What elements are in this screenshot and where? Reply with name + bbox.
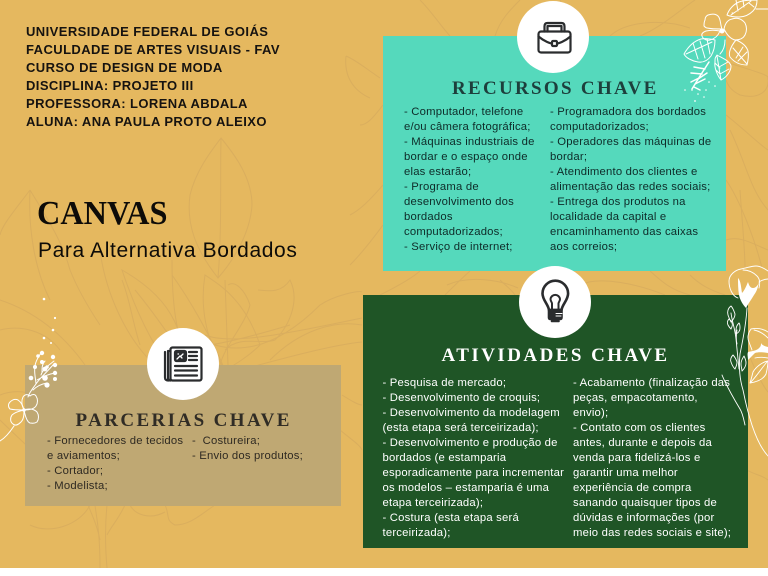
text: recursos column 2: - Entrega dos produtos na xyxy=(550,196,686,208)
text: atividades column 1: os modelos – estamparia é uma xyxy=(382,482,549,494)
header: institution block: UNIVERSIDADE FEDERAL DE GOIÁS xyxy=(26,24,268,39)
text: atividades column 2 xyxy=(573,377,731,539)
decoration: white flowers and stem right edge xyxy=(722,266,768,456)
text: recursos column 2: localidade da capital e xyxy=(550,211,666,223)
text: recursos column 1 xyxy=(404,106,535,253)
text: atividades column 1: - Costura (esta etapa será xyxy=(382,512,519,524)
text: atividades column 1: bordados (e estamparia xyxy=(382,452,506,464)
text: parcerias column 1 xyxy=(47,434,183,492)
text: parcerias column 2: - Envio dos produtos; xyxy=(192,450,303,462)
text: recursos column 1: e/ou câmera fotográfica; xyxy=(404,121,531,133)
text: recursos column 2: computadorizados; xyxy=(550,121,649,133)
text: atividades column 1: (esta etapa será terceirizada); xyxy=(382,422,539,434)
text: recursos column 2: aos correios; xyxy=(550,241,617,253)
subtitle: Para Alternativa Bordados xyxy=(38,239,297,262)
text: recursos column 2 xyxy=(550,106,711,253)
text: recursos column 2: - Operadores das máquinas de xyxy=(550,136,711,148)
icon: light bulb in white circle xyxy=(519,266,591,338)
text: atividades column 1 xyxy=(382,377,564,539)
text: recursos column 1: bordados xyxy=(404,211,453,223)
icon: newspaper in white circle xyxy=(147,328,219,400)
text: parcerias column 1: e aviamentos; xyxy=(47,450,120,462)
text: recursos column 1: - Serviço de internet; xyxy=(404,241,513,253)
text: parcerias column 2 xyxy=(192,434,303,462)
text: recursos column 2: bordar; xyxy=(550,151,587,163)
header: institution block: DISCIPLINA: PROJETO III xyxy=(26,78,194,93)
header: institution block: CURSO DE DESIGN DE MODA xyxy=(26,60,223,75)
text: recursos column 2: alimentação das redes sociais; xyxy=(550,181,710,193)
text: atividades column 2: sanando quaisquer tipos de xyxy=(573,497,717,509)
heading: parcerias chave: PARCERIAS CHAVE xyxy=(76,410,292,430)
text: atividades column 2: dúvidas e informações (por xyxy=(573,512,714,524)
text: recursos column 1: - Programa de xyxy=(404,181,479,193)
text: recursos column 2: encaminhamento das caixas xyxy=(550,226,698,238)
text: atividades column 2: meio das redes sociais e site); xyxy=(573,527,731,539)
text: atividades column 1: - Pesquisa de mercado; xyxy=(382,377,506,389)
header: institution block: FACULDADE DE ARTES VISUAIS - FAV xyxy=(26,42,280,57)
text: parcerias column 1: - Modelista; xyxy=(47,480,108,492)
decoration: white flower and sprig left xyxy=(0,298,58,442)
text: atividades column 1: esporadicamente para incrementar xyxy=(382,467,564,479)
header: institution block: ALUNA: ANA PAULA PROTO ALEIXO xyxy=(26,114,267,129)
text: atividades column 2: - Acabamento (finalização das xyxy=(573,377,730,389)
text: atividades column 2: - Contato com os clientes xyxy=(573,422,705,434)
text: atividades column 2: antes, durante e depois da xyxy=(573,437,712,449)
text: atividades column 2: garantir uma melhor xyxy=(573,467,678,479)
text: recursos column 1: bordar e o espaço onde xyxy=(404,151,528,163)
decoration: white flower top right xyxy=(684,0,768,102)
header: institution block: PROFESSORA: LORENA ABDALA xyxy=(26,96,248,111)
text: recursos column 1: desenvolvimento dos xyxy=(404,196,514,208)
text: atividades column 1: etapa terceirizada); xyxy=(382,497,483,509)
text: atividades column 1: - Desenvolvimento de croquis; xyxy=(382,392,540,404)
panel: parcerias chave xyxy=(24,364,341,506)
text: parcerias column 1: - Cortador; xyxy=(47,464,103,476)
text: atividades column 1: - Desenvolvimento da modelagem xyxy=(382,407,560,419)
text: atividades column 2: venda para fidelizá-los e xyxy=(573,452,700,464)
text: recursos column 2: - Programadora dos bordados xyxy=(550,106,706,118)
text: parcerias column 1: - Fornecedores de tecidos xyxy=(47,434,183,446)
icon: briefcase in white circle xyxy=(517,1,589,73)
text: atividades column 1: terceirizada); xyxy=(382,527,451,539)
text: recursos column 1: elas estarão; xyxy=(404,166,471,178)
text: atividades column 2: peças, empacotamento, xyxy=(573,392,698,404)
title: CANVAS xyxy=(37,195,167,232)
text: recursos column 1: - Máquinas industriais de xyxy=(404,136,535,148)
panel: atividades chave xyxy=(362,295,748,548)
text: atividades column 2: envio); xyxy=(573,407,608,419)
text: atividades column 1: - Desenvolvimento e produção de xyxy=(382,437,558,449)
text: recursos column 1: - Computador, telefone xyxy=(404,106,523,118)
heading: recursos chave: RECURSOS CHAVE xyxy=(452,78,659,99)
text: recursos column 1: computadorizados; xyxy=(404,226,503,238)
panel: recursos chave xyxy=(383,36,726,271)
text: parcerias column 2: - Costureira; xyxy=(192,434,260,446)
header: institution block xyxy=(26,24,280,129)
text: recursos column 2: - Atendimento dos clientes e xyxy=(550,166,698,178)
text: atividades column 2: experiência de compra xyxy=(573,482,692,494)
heading: atividades chave: ATIVIDADES CHAVE xyxy=(442,345,670,366)
